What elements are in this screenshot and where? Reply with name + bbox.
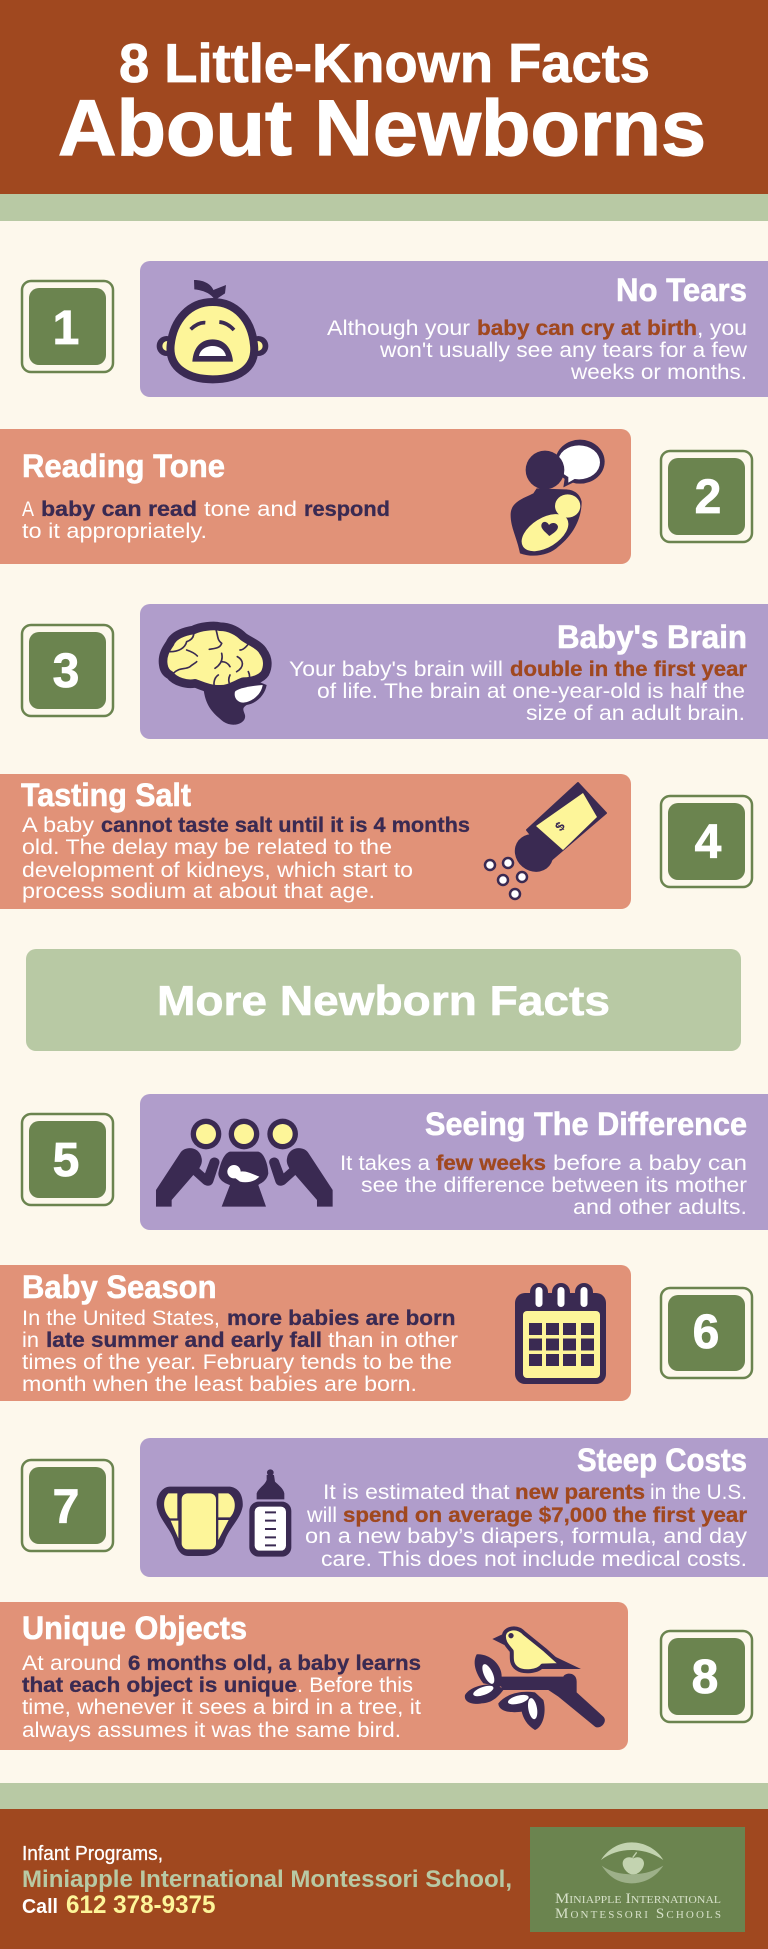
body text: in the U.S. [650, 1481, 747, 1504]
body text: always assumes it was the same bird. [22, 1719, 401, 1742]
header band with title: About Newborns [58, 83, 706, 172]
number badge 3 [22, 625, 113, 716]
body text: month when the least babies are born. [22, 1373, 417, 1396]
number badge 1 [22, 281, 113, 372]
title: Seeing The Difference [425, 1106, 747, 1142]
body text: spend on average $7,000 the first year [343, 1504, 747, 1527]
body text: weeks or months. [570, 361, 747, 384]
number badge 8 [661, 1631, 752, 1722]
body text: times of the year. February tends to be the [22, 1351, 452, 1374]
title: Tasting Salt [21, 777, 191, 813]
section banner: More Newborn Facts: More Newborn Facts [157, 977, 610, 1024]
contact text: Miniapple International Montessori School, [22, 1866, 512, 1893]
number badge 7 [22, 1460, 113, 1551]
number badge 8: 8 [692, 1651, 718, 1704]
body text: won't usually see any tears for a few [379, 339, 748, 362]
icon: calendar [515, 1283, 606, 1384]
panel 7: Steep Costs [140, 1438, 768, 1577]
body text [22, 814, 470, 903]
body text: few weeks [436, 1152, 546, 1175]
body text: It is estimated that [323, 1481, 510, 1504]
contact text: Infant Programs, [22, 1843, 163, 1865]
body text: In the United States, [22, 1307, 220, 1330]
title: No Tears [616, 272, 747, 308]
panel 1: No Tears [140, 261, 768, 397]
panel 4: Tasting Salt [0, 774, 631, 909]
icon: diaper and bottle [157, 1469, 291, 1557]
number badge 6 [661, 1288, 752, 1378]
number badge 4 [661, 796, 752, 887]
body text [22, 1307, 458, 1396]
body text: 6 months old, a baby learns [128, 1652, 421, 1675]
icon: salt shaker: $ [552, 818, 568, 834]
body text: on a new baby’s diapers, formula, and day [305, 1525, 748, 1548]
body text: It takes a [340, 1152, 430, 1175]
body text: , you [697, 317, 747, 340]
number badge 2: 2 [695, 471, 721, 524]
header band with title [0, 0, 768, 221]
panel 5: Seeing The Difference [140, 1094, 768, 1230]
section banner: More Newborn Facts [26, 949, 741, 1051]
body text: tone and [204, 498, 297, 521]
body text: process sodium at about that age. [22, 880, 375, 903]
panel 8: Unique Objects [0, 1602, 628, 1750]
number badge 7: 7 [53, 1481, 79, 1534]
body text: in [22, 1329, 39, 1352]
body text [22, 498, 390, 543]
body text [305, 1481, 748, 1571]
panel 3: Baby's Brain [140, 604, 768, 739]
school logo: Montessori Schools [555, 1906, 721, 1922]
icon: crying baby [157, 280, 268, 379]
icon: brain [163, 626, 267, 725]
body text [340, 1152, 747, 1219]
contact text: Call [22, 1896, 58, 1918]
number badge 5: 5 [53, 1134, 79, 1187]
title: Baby Season [22, 1269, 216, 1305]
title: Unique Objects [22, 1610, 247, 1646]
number badge 4: 4 [695, 816, 722, 869]
body text: late summer and early fall [46, 1329, 322, 1352]
icon: salt shaker [485, 783, 606, 899]
school logo: Miniapple International [555, 1891, 721, 1907]
title: Reading Tone [22, 448, 225, 484]
number badge 1: 1 [53, 302, 79, 355]
body text [22, 1652, 421, 1742]
body text: development of kidneys, which start to [22, 859, 413, 882]
body text: than in other [328, 1329, 458, 1352]
body text: of life. The brain at one-year-old is half the [317, 680, 745, 703]
icon: bird on branch [465, 1628, 605, 1730]
body text: Although your [327, 317, 470, 340]
body text: that each object is unique [22, 1674, 297, 1697]
body text: to it appropriately. [22, 520, 207, 543]
body text: see the difference between its mother [361, 1174, 747, 1197]
number badge 2 [661, 451, 752, 542]
body text: cannot taste salt until it is 4 months [101, 814, 470, 837]
body text: baby can read [41, 498, 197, 521]
body text: Your baby's brain will [289, 658, 503, 681]
number badge 6: 6 [693, 1306, 719, 1359]
body text: new parents [515, 1481, 645, 1504]
body text: . Before this [297, 1674, 413, 1697]
body text: double in the first year [510, 658, 747, 681]
number badge 3: 3 [53, 645, 79, 698]
body text: more babies are born [227, 1307, 456, 1330]
body text: At around [22, 1652, 122, 1675]
footer [0, 1783, 768, 1949]
body text [327, 317, 748, 384]
body text: baby can cry at birth [477, 317, 697, 340]
title: Baby's Brain [557, 619, 747, 655]
title: Steep Costs [577, 1442, 747, 1478]
panel 2: Reading Tone [0, 429, 631, 564]
icon: mother and baby with speech bubble [511, 440, 605, 559]
contact text: 612 378-9375 [66, 1891, 216, 1919]
body text: before a baby can [553, 1152, 747, 1175]
body text: time, whenever it sees a bird in a tree, it [22, 1696, 421, 1719]
body text: and other adults. [573, 1196, 747, 1219]
body text: A [22, 498, 34, 521]
body text: respond [304, 498, 390, 521]
body text: A baby [22, 814, 95, 837]
contact text [22, 1843, 512, 1919]
panel 6: Baby Season [0, 1265, 631, 1401]
body text: size of an adult brain. [526, 702, 745, 725]
icon: three adults and baby [156, 1119, 333, 1207]
body text [289, 658, 747, 725]
school logo [530, 1827, 745, 1932]
body text: old. The delay may be related to the [22, 836, 392, 859]
number badge 5 [22, 1114, 113, 1205]
body text: will [306, 1504, 337, 1527]
header band with title: 8 Little-Known Facts [119, 32, 650, 94]
body text: care. This does not include medical costs. [321, 1548, 747, 1571]
